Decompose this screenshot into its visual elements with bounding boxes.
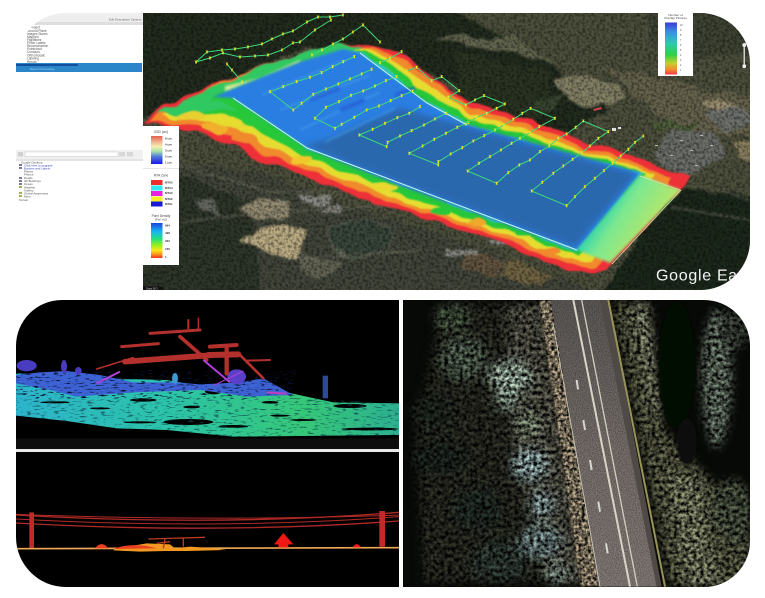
MTA zone legend: MTA5 — [165, 180, 173, 184]
point density legend: 1 — [165, 255, 167, 259]
point density legend: (Pts/ m2) — [155, 217, 167, 221]
layer tree: Contours — [27, 50, 40, 54]
places tree: Gallery — [24, 188, 34, 192]
legend: GSD, MTA zone, point density — [143, 126, 179, 265]
layer tree: Labeling — [27, 56, 39, 60]
point density legend: 166 — [165, 247, 170, 251]
lane dashes — [577, 380, 608, 553]
places tree: 3D Buildings — [24, 179, 41, 183]
MTA zone legend: MTA3 — [165, 191, 173, 195]
places tree: Photos — [24, 172, 34, 176]
upper edge green wash — [158, 44, 362, 116]
MTA zone legend: MTA2 — [165, 197, 173, 201]
road surface — [551, 300, 657, 587]
zoom slider — [742, 43, 746, 68]
Google Earth watermark: Google Earth — [656, 268, 759, 284]
panel: aerial road photo — [403, 300, 753, 590]
places tree: Global Awareness — [24, 192, 49, 196]
places tree: Roads — [24, 176, 33, 180]
legend: overlap pictures: 9 — [680, 29, 682, 32]
point cloud: power line corridor — [16, 511, 399, 552]
legend: overlap pictures: Number of — [668, 13, 683, 17]
low vegetation — [113, 543, 227, 552]
selected row: Export Processing — [30, 67, 55, 71]
layer tree: Ground Plane — [27, 29, 47, 33]
blue overlap core — [213, 49, 640, 250]
ground holes — [40, 389, 398, 430]
layer tree: Orthomosaic — [27, 54, 45, 58]
point cloud: industrial site — [16, 318, 399, 449]
GSD legend: 1 cm — [165, 160, 172, 164]
purple trees — [17, 360, 328, 398]
legend: overlap pictures: 7 — [680, 39, 682, 42]
dark blue core — [304, 108, 636, 247]
GSD legend: 3 cm — [165, 148, 172, 152]
layer tree — [27, 26, 48, 64]
selected row — [16, 63, 142, 72]
places tree: Ocean — [24, 182, 33, 186]
shrubs and tree — [274, 533, 361, 547]
road grain — [551, 300, 657, 587]
swath bright streaks — [262, 60, 415, 142]
red plant structure — [97, 318, 270, 378]
divider — [16, 449, 399, 452]
software sidebar: Edit Description — [109, 18, 130, 22]
legend: overlap pictures — [658, 13, 693, 76]
trees right of road — [608, 300, 753, 590]
terrain texture — [143, 13, 750, 290]
software sidebar — [16, 13, 143, 201]
places tree: Click here to upgrade — [24, 164, 53, 168]
GSD legend — [151, 130, 172, 164]
poles — [29, 511, 385, 548]
layer tree: Images Stores — [27, 32, 48, 36]
centre lines — [573, 300, 630, 587]
point density legend — [151, 214, 171, 259]
terrain roads — [180, 165, 750, 260]
GSD legend: 2 cm — [165, 154, 172, 158]
MTA zone legend — [151, 174, 173, 206]
purple conveyors — [97, 360, 287, 394]
places tree — [19, 160, 53, 202]
places tree: Weather — [24, 186, 35, 190]
layer tree: Mapped — [27, 35, 39, 39]
places tree: Borders and Labels — [24, 166, 51, 170]
swath upper pale edge — [225, 60, 300, 92]
MTA zone legend: MTA Zone — [154, 174, 168, 178]
layer tree: Reconstruction — [27, 44, 48, 48]
map credit — [143, 286, 163, 290]
point density legend: Point Density — [152, 214, 171, 218]
flight lines and waypoints — [196, 15, 380, 82]
overlap heat map swath — [143, 43, 690, 273]
satellite terrain — [143, 13, 750, 290]
panel: drone survey map — [16, 0, 765, 300]
point density legend: 664 — [165, 224, 170, 228]
layer tree: Report — [27, 60, 37, 64]
places tree: Terrain — [19, 198, 29, 202]
MTA zone legend: MTA1 — [165, 202, 173, 206]
layer tree: Photo Labels — [27, 41, 46, 45]
places tree: Places — [24, 170, 34, 174]
core edge lines — [233, 53, 577, 250]
legend: overlap pictures: 3 — [680, 59, 682, 62]
legend: overlap pictures: 5 — [680, 49, 682, 52]
search bar — [16, 150, 143, 161]
blue low structures — [16, 371, 293, 397]
road verge — [538, 300, 600, 587]
places tree: More — [24, 194, 31, 198]
legend: overlap pictures: 6 — [680, 44, 682, 47]
panel: LiDAR point clouds — [16, 300, 399, 587]
legend: overlap pictures: 2 — [680, 64, 682, 67]
swath end zone — [577, 175, 681, 263]
point density legend: 498 — [165, 231, 170, 235]
MTA zone legend: MTA4 — [165, 186, 173, 190]
map credit: Data SIO — [146, 286, 158, 290]
places icons — [19, 164, 22, 185]
legend: overlap pictures: 4 — [680, 54, 682, 57]
legend: overlap pictures: 1 — [680, 69, 682, 72]
layer tree: Project — [30, 26, 40, 30]
ground surface — [16, 373, 399, 437]
point density legend: 332 — [165, 239, 170, 243]
branches — [148, 537, 205, 548]
layer tree: Pointcloud — [27, 47, 42, 51]
legend: overlap pictures: Overlap Pictures — [664, 16, 687, 20]
ground speckle — [16, 392, 399, 437]
GSD legend: 4 cm — [165, 142, 172, 146]
GSD legend: 6 cm — [165, 136, 172, 140]
legend: overlap pictures: 10 — [680, 24, 683, 27]
flight rows over swath — [270, 52, 643, 206]
trees left of road — [407, 300, 597, 587]
band mottling — [174, 111, 562, 254]
dark tree gap — [658, 302, 695, 428]
ground line — [17, 548, 399, 549]
layer tree: Flightlines — [27, 38, 42, 42]
GSD legend: GSD (cm) — [154, 130, 168, 134]
yellow verge strip — [608, 300, 665, 587]
wires — [16, 512, 399, 528]
software sidebar: Options — [131, 18, 142, 22]
places tree: Google Desktop — [21, 160, 43, 164]
legend: overlap pictures: 8 — [680, 34, 682, 37]
